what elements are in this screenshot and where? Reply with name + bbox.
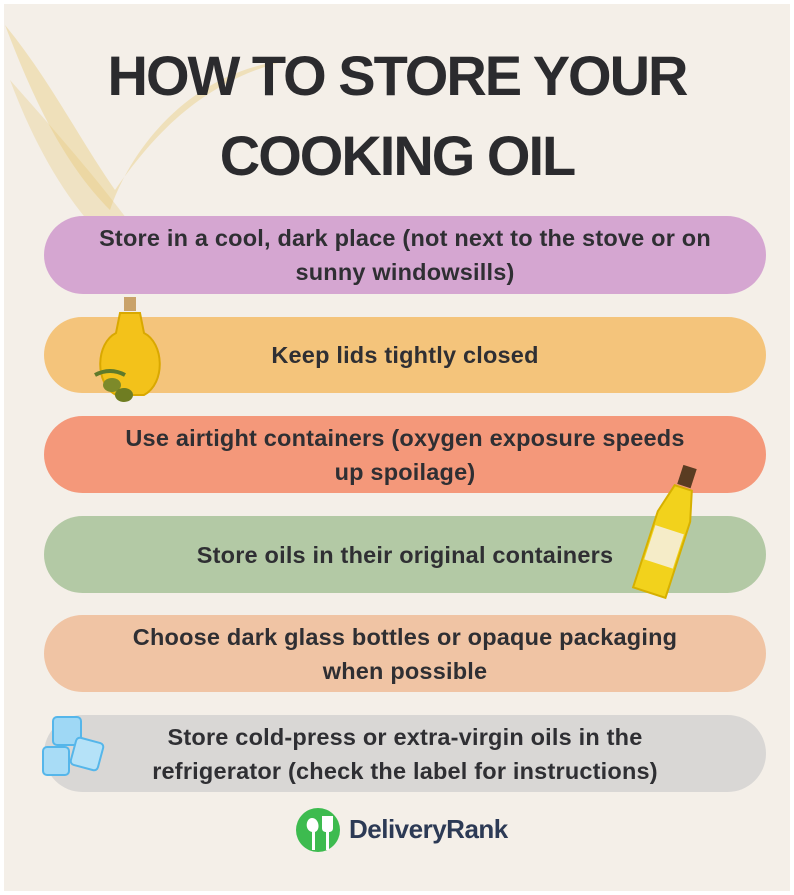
oil splash decoration — [5, 25, 290, 216]
pill: dark glass: Choose dark glass bottles or opaque packaging — [133, 624, 677, 650]
pill: dark glass: when possible — [323, 658, 487, 684]
pill: lids: Keep lids tightly closed — [271, 342, 539, 368]
pill: refrigerator: refrigerator (check the label for instructions) — [152, 758, 658, 784]
pill: original containers — [44, 516, 766, 593]
pill: original containers: Store oils in their original containers — [197, 542, 613, 568]
pill: refrigerator: Store cold-press or extra-virgin oils in the — [168, 724, 642, 750]
logo — [296, 808, 508, 852]
pill: airtight — [44, 416, 766, 493]
icon: ice cubes — [42, 716, 104, 776]
pill: airtight: up spoilage) — [335, 458, 475, 484]
title: HOW TO STORE YOUR — [108, 44, 686, 107]
brand name: DeliveryRank — [349, 814, 508, 844]
pill: cool dark place — [44, 216, 766, 294]
icon: logo circle — [296, 808, 340, 852]
pill: cool dark place: sunny windowsills) — [295, 259, 515, 285]
pill: cool dark place: Store in a cool, dark place (not next to the stove or on — [99, 225, 711, 251]
pill: refrigerator — [44, 715, 766, 792]
icon: oil bottle — [632, 464, 697, 600]
pill: airtight: Use airtight containers (oxygen exposure speeds — [125, 424, 685, 450]
icon: oil jug — [94, 297, 161, 402]
title: COOKING OIL — [220, 124, 574, 187]
title — [108, 44, 688, 187]
pill: dark glass — [44, 615, 766, 692]
pill: lids — [44, 317, 766, 393]
